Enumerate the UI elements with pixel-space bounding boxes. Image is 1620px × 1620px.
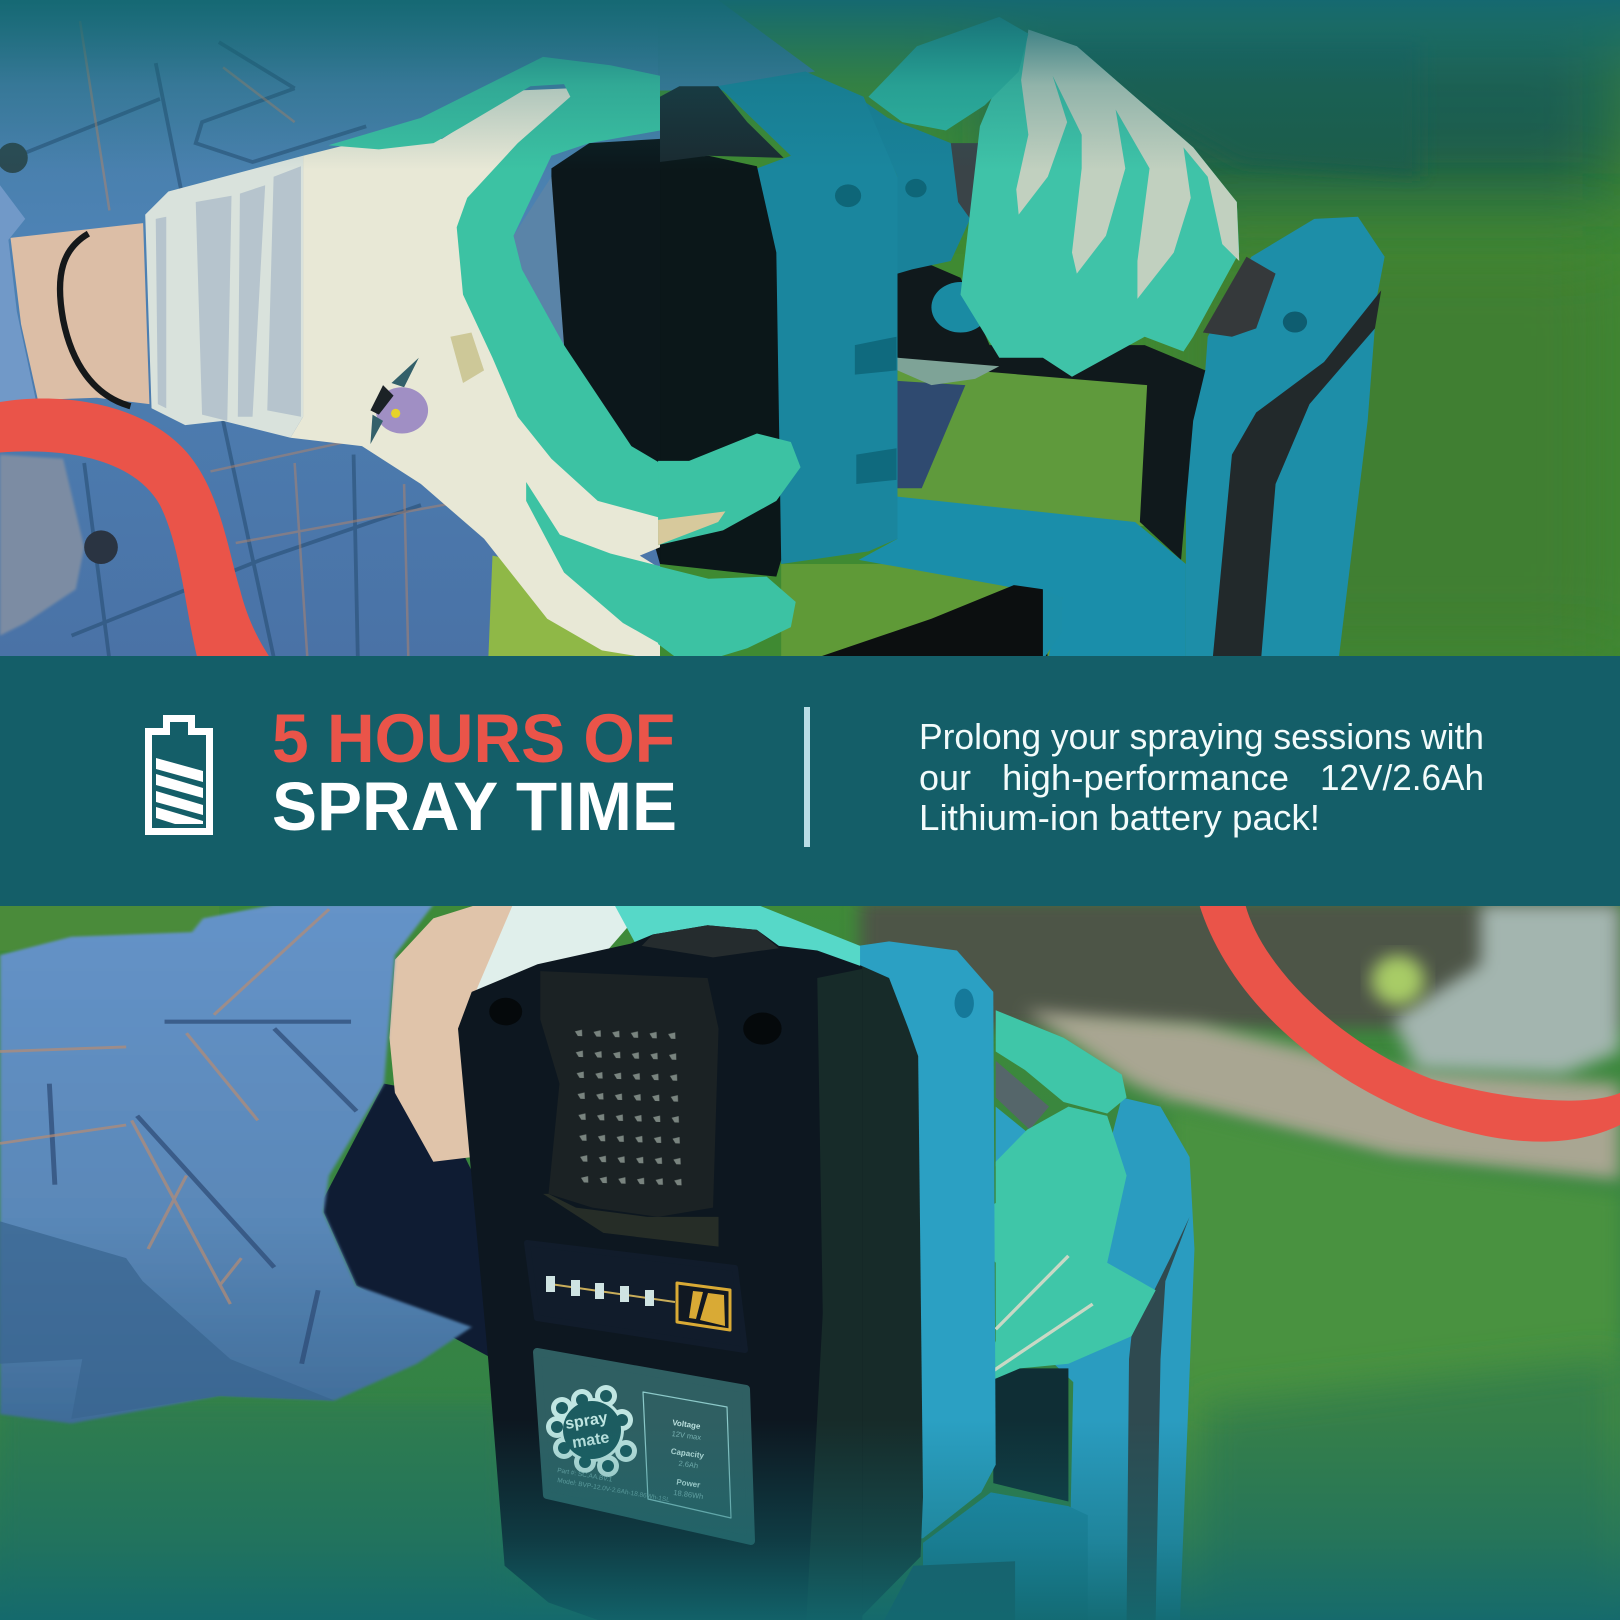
distant trees xyxy=(1038,42,1420,177)
glove cuff xyxy=(472,905,647,1001)
glove stains xyxy=(450,333,484,383)
battery spec label xyxy=(537,1352,751,1541)
rear body xyxy=(1054,1097,1194,1620)
top teal fade xyxy=(0,0,1620,170)
grass corner under glove xyxy=(488,556,660,660)
description text: Prolong your spraying sessions with xyxy=(919,716,1484,757)
heading: 5 HOURS OF xyxy=(272,700,675,777)
specification box: 2.6Ah xyxy=(678,1459,699,1470)
yard background xyxy=(0,900,1620,1620)
middle finger tip xyxy=(658,434,801,545)
grass in frame window xyxy=(898,370,1154,526)
spray mate logo xyxy=(546,1385,637,1477)
shirt plaid lines xyxy=(13,42,421,660)
dark underside xyxy=(324,1084,494,1359)
indicator bars xyxy=(546,1276,654,1306)
rubber strip xyxy=(1213,290,1381,660)
battery grip bumps xyxy=(573,1026,686,1194)
teal info band xyxy=(0,656,1620,906)
glove finger top xyxy=(996,1010,1127,1114)
battery left portion xyxy=(514,139,660,564)
bracelet xyxy=(60,234,130,406)
heading: SPRAY TIME xyxy=(272,768,677,845)
cream knit xyxy=(290,88,660,660)
grey grips xyxy=(1203,257,1276,337)
hose xyxy=(810,585,1048,660)
specification box: Capacity xyxy=(670,1447,705,1460)
mount holes xyxy=(489,998,522,1025)
lower finger coating xyxy=(526,482,660,644)
garden background xyxy=(0,0,1620,660)
specification box: Power xyxy=(676,1477,701,1490)
neck xyxy=(864,101,970,274)
bottom teal fade xyxy=(0,1420,1620,1620)
description text: 12V/2.6Ah xyxy=(1320,757,1484,798)
forearm xyxy=(389,905,538,1162)
part number text: Model: BVP-12.0V-2.6Ah-18.86Wh-1SL xyxy=(557,1477,671,1504)
gravel path xyxy=(1025,1010,1620,1180)
glove fingers xyxy=(971,1107,1156,1387)
grey metal objects xyxy=(1393,905,1620,1074)
dark gap xyxy=(993,1368,1068,1502)
description text xyxy=(919,716,1484,838)
shirt button xyxy=(0,143,28,173)
battery black side xyxy=(660,156,781,577)
thumb xyxy=(868,17,1028,130)
lower finger tip xyxy=(658,566,796,660)
grey handle xyxy=(996,1061,1049,1130)
dark trees xyxy=(860,900,1620,1029)
cuff xyxy=(145,156,303,438)
lower block xyxy=(923,1492,1088,1620)
sleeve plaid lines xyxy=(49,1022,357,1364)
plaid shirt xyxy=(0,0,660,660)
lower arm xyxy=(859,497,1186,660)
spray mate logo: mate xyxy=(571,1429,611,1452)
grass right xyxy=(1170,1107,1620,1620)
description text: our xyxy=(919,757,971,798)
main housing xyxy=(858,941,996,1543)
black handle frame xyxy=(898,263,1205,560)
specification box: 12V max xyxy=(671,1429,702,1442)
top photo: gloved hands holding sprayer xyxy=(0,0,1620,660)
left glove xyxy=(145,57,801,660)
yellow battery icon xyxy=(677,1283,730,1330)
description text: Lithium-ion battery pack! xyxy=(919,797,1320,838)
battery body xyxy=(458,925,862,1620)
forearm xyxy=(11,223,149,404)
cuff knit stripes xyxy=(156,166,301,421)
sprayer behind battery xyxy=(858,941,1194,1620)
knit back and stripes xyxy=(1016,29,1239,299)
upper shirt and window shirt right xyxy=(658,0,1420,660)
shirt cuff left xyxy=(0,185,36,404)
specification box: 18.86Wh xyxy=(673,1488,704,1501)
teal coating thumb and palm xyxy=(328,57,660,518)
battery latch xyxy=(642,925,779,957)
battery side edge xyxy=(858,964,923,1620)
main housing xyxy=(704,72,898,564)
part number text: Part #: SC.AA.BV.1 xyxy=(557,1467,613,1484)
red curve bottom xyxy=(1199,905,1620,1142)
specification box xyxy=(643,1392,731,1518)
bottom photo: battery pack close-up xyxy=(0,900,1620,1620)
icon: battery xyxy=(145,715,213,835)
heading xyxy=(272,700,677,845)
sleeve, arm and battery xyxy=(0,905,862,1620)
grip panel xyxy=(540,971,719,1217)
battery indicator panel xyxy=(527,1243,745,1350)
sleeve shadows xyxy=(0,1221,335,1419)
description text: high-performance xyxy=(1002,757,1289,798)
specification box: Voltage xyxy=(672,1418,702,1431)
sprayer and battery top xyxy=(660,72,1385,660)
flower embroidery xyxy=(376,387,428,434)
red curve top xyxy=(0,398,271,660)
grip arch xyxy=(543,1194,719,1247)
plaid sleeve xyxy=(0,905,472,1423)
rear body xyxy=(1186,217,1385,660)
spray mate logo: spray xyxy=(564,1409,609,1433)
divider xyxy=(804,707,810,847)
right glove xyxy=(868,17,1239,377)
